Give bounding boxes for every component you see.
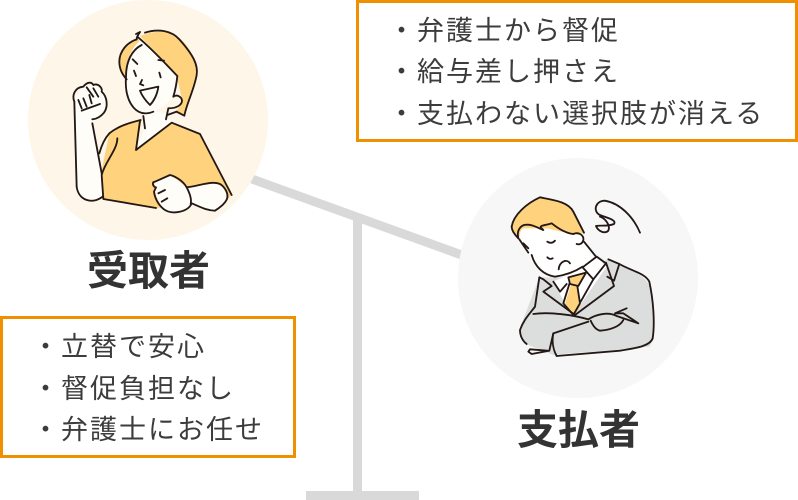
panel: recipient benefits	[0, 316, 296, 458]
icon: happy recipient person	[73, 31, 232, 212]
bullet: wage garnishment: ・給与差し押さえ	[388, 57, 620, 87]
scale beam	[252, 179, 470, 258]
heading: recipient: 受取者	[87, 248, 210, 294]
scale post	[353, 219, 362, 494]
scale base	[306, 491, 419, 500]
icon: worried payer person	[512, 197, 654, 356]
bullet: no option not to pay: ・支払わない選択肢が消える	[388, 99, 764, 129]
circle: recipient	[28, 0, 268, 240]
panel: payer consequences	[356, 0, 798, 142]
heading: payer: 支払者	[517, 407, 640, 453]
bullet: no collection burden: ・督促負担なし	[32, 374, 235, 404]
circle: payer	[458, 158, 698, 398]
bullet: advance payment: ・立替で安心	[32, 332, 206, 362]
bullet: leave to lawyer: ・弁護士にお任せ	[32, 415, 264, 445]
bullet: lawyer demand: ・弁護士から督促	[388, 16, 620, 46]
